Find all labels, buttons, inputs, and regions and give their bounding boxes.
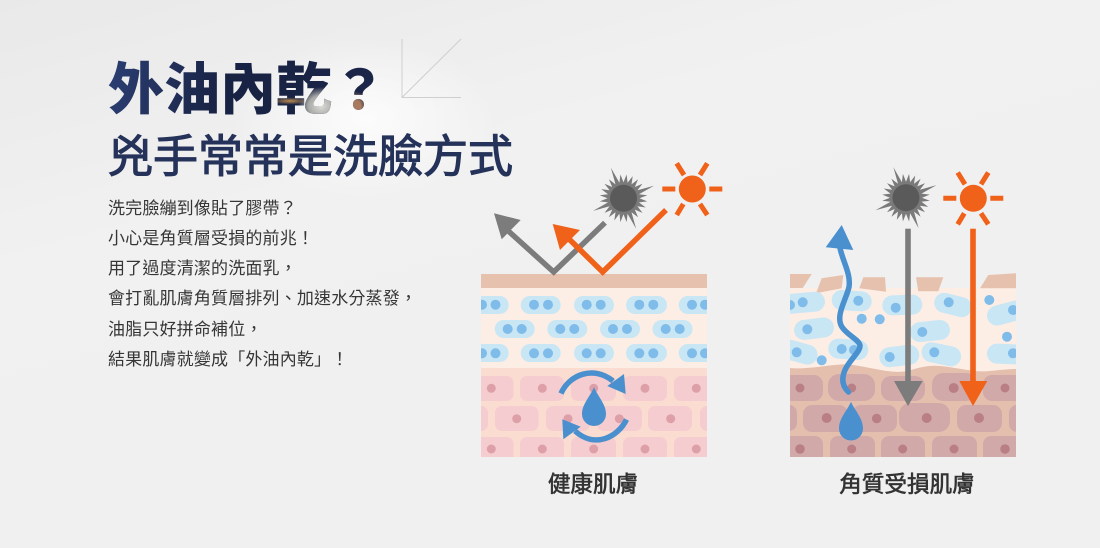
scattered damaged cells xyxy=(790,290,1016,368)
healthy cells: stratum corneum rows xyxy=(468,296,719,362)
icon: sun xyxy=(943,173,1003,224)
icon: pollution particle xyxy=(593,168,654,229)
arrow: sunlight penetrating xyxy=(959,229,987,406)
icon: pollution particle xyxy=(876,167,936,228)
decorative corner lines xyxy=(402,38,462,98)
text block: description: 結果肌膚就變成「外油內乾」！ xyxy=(108,350,348,369)
text block: description: 洗完臉繃到像貼了膠帶？ xyxy=(108,198,297,218)
icon: water drop xyxy=(839,402,863,441)
arrow: sunlight reflected xyxy=(553,210,666,272)
panel: damaged skin diagram xyxy=(790,168,1016,457)
icon: sun xyxy=(662,163,722,215)
text block: description: 用了過度清潔的洗面乳， xyxy=(108,259,297,278)
text block: description: 會打亂肌膚角質層排列、加速水分蒸發， xyxy=(108,289,417,308)
label: damaged skin: 角質受損肌膚 xyxy=(839,472,975,497)
skin cross-section: damaged xyxy=(790,273,1016,457)
skin cross-section: healthy xyxy=(481,274,707,457)
icon: circulating water arrows and drop xyxy=(561,373,626,440)
text block: description: 小心是角質層受損的前兆！ xyxy=(108,229,314,248)
title: sub heading: 兇手常常是洗臉方式 xyxy=(108,131,513,182)
label: healthy skin: 健康肌膚 xyxy=(548,472,638,497)
broken stratum corneum flakes xyxy=(789,273,1016,293)
arrow: pollution penetrating xyxy=(894,229,923,406)
arrow: pollution reflected xyxy=(494,213,605,272)
panel: healthy skin diagram xyxy=(481,162,722,457)
healthy cells: dermis rows xyxy=(481,376,707,457)
damaged dermis xyxy=(790,364,1016,457)
text block: description xyxy=(108,198,417,369)
arrow: water escaping upward xyxy=(826,225,860,392)
text block: description: 油脂只好拼命補位， xyxy=(108,320,263,339)
